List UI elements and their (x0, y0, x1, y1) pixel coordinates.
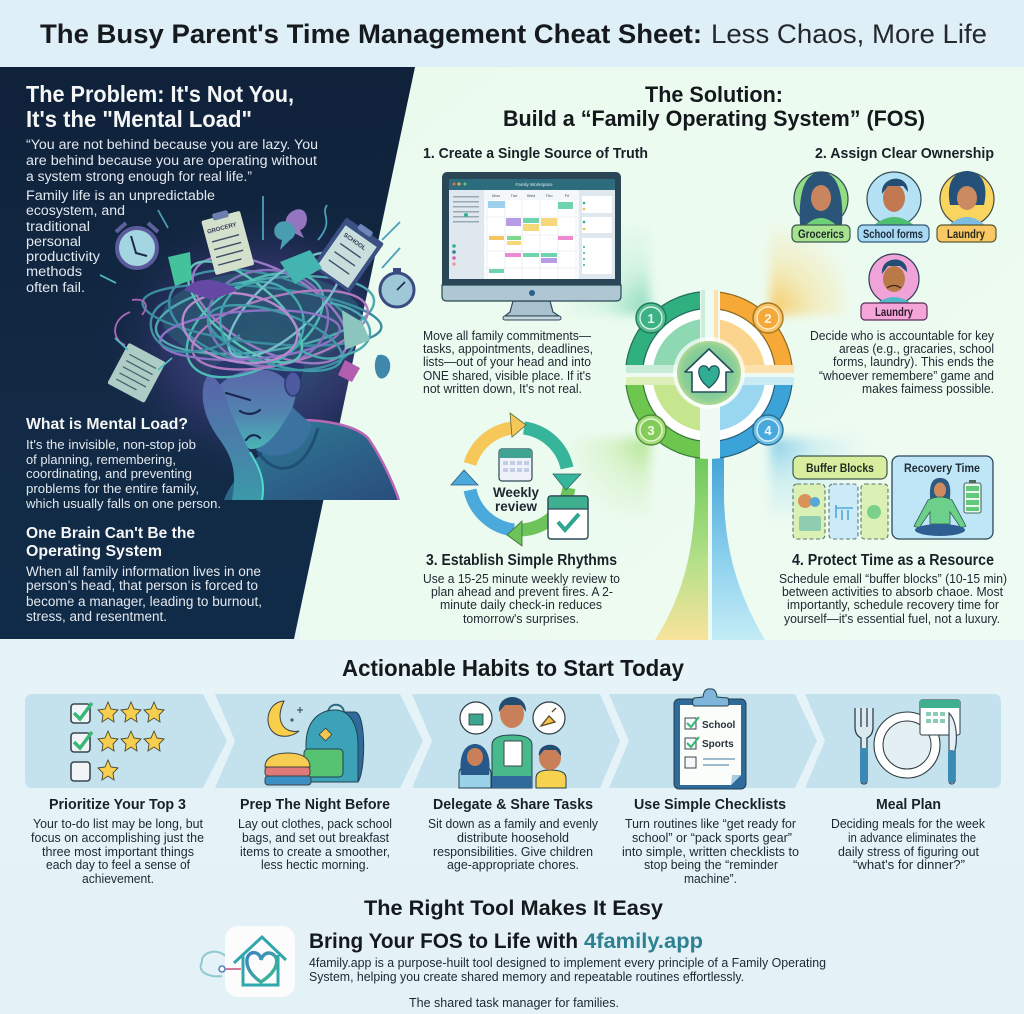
quote: a system strong enough for real life.” (26, 169, 252, 184)
body: what is mental load: which usually falls on one person. (25, 496, 221, 511)
head (220, 369, 296, 449)
avatar: school forms (858, 172, 929, 242)
icon: weekly review cycle (451, 413, 588, 546)
habit: meal plan: in advance eliminates the (848, 831, 976, 845)
brow, eye and mouth (226, 393, 260, 440)
badge 4 (753, 415, 783, 445)
title: Less Chaos, More Life (711, 19, 987, 49)
habit: prep the night before: Lay out clothes, pack school (238, 817, 392, 831)
heading: the problem (26, 81, 294, 132)
body 2: forms, laundry). This ends the (833, 355, 994, 369)
text: family life: ecosystem, and (26, 203, 125, 218)
body 3: Use a 15-25 minute weekly review to (423, 572, 620, 586)
body 2: Decide who is accountable for key (810, 329, 995, 343)
heading: the solution: The Solution: (645, 82, 783, 107)
quadrant 1 (626, 291, 700, 365)
icon: family delegating tasks (459, 697, 566, 788)
label: weekly review: Weekly (493, 484, 539, 500)
habit: delegate: Sit down as a family and evenly (428, 817, 599, 831)
heading 2: 2. Assign Clear Ownership (815, 145, 994, 162)
habit: meal plan: Meal Plan (876, 797, 941, 813)
habit: prioritize: focus on accomplishing just the (31, 831, 204, 845)
buffer icons (798, 494, 881, 531)
badge 2 (753, 303, 783, 333)
habit: delegate: responsibilities. Give children (433, 845, 593, 859)
body: one brain: stress, and resentment. (26, 609, 167, 624)
body 2: areas (e.g., gracaries, school (839, 342, 994, 356)
habit: checklists: machine”. (684, 872, 737, 886)
child right (536, 770, 566, 788)
illustration: overwhelmed parent with tangled thoughts (100, 196, 414, 500)
heading 1: 1. Create a Single Source of Truth (423, 145, 648, 162)
badge 3 (636, 415, 666, 445)
icon: floating notes and bubbles (168, 209, 390, 382)
icon: alarm clock (116, 223, 158, 268)
body 1: lists—out of your head and into (423, 355, 591, 369)
heading: what is mental load: What is Mental Load? (26, 416, 188, 433)
body 2: makes faimess possible. (862, 382, 994, 396)
habit: checklists: Turn routines like “get ready for (625, 817, 796, 831)
hair (210, 352, 304, 384)
cross bands (626, 365, 700, 373)
hand (203, 374, 263, 500)
habit: meal plan: daily stress of figuring out (838, 845, 980, 859)
heading: bring your FOS to life (309, 930, 703, 953)
icon: notepad (107, 343, 166, 403)
text: family life: productivity (26, 249, 100, 264)
text: family life: Family life is an unpredictable (26, 188, 215, 203)
body 4: yourself—it's essential fuel, not a luxury. (784, 612, 1000, 626)
title: The Busy Parent's Time Management Cheat Sheet: (40, 19, 702, 49)
body: what is mental load (25, 437, 221, 511)
heading: the right tool: The Right Tool Makes It Easy (364, 897, 663, 920)
habit: prioritize: three most important things (42, 845, 194, 859)
section 1: single source of truth (423, 145, 648, 396)
body 1: not written down, It's not real. (423, 382, 582, 396)
habit: checklists: into simple, written checklists to (622, 845, 799, 859)
panel text: what is mental load (25, 416, 221, 511)
habit: prioritize: achievement. (82, 872, 154, 886)
icon: monitor with calendar: Mon (492, 193, 500, 198)
diagram: family operating system wheel (625, 290, 794, 459)
connector fillets (565, 225, 863, 527)
badge 1 (636, 303, 666, 333)
habit: checklists: Use Simple Checklists (634, 797, 786, 813)
avatar: groceries: Grocerics (798, 227, 844, 241)
badge 3: 3 (647, 423, 655, 438)
body 3: tomorrow's surprises. (463, 612, 579, 626)
text: family life: personal (26, 234, 81, 249)
text: 4family description: System, helping you create shared memory and repeatable routines effortlessly. (309, 970, 744, 984)
body 4: importantly, schedule recovery time for (787, 598, 999, 612)
recovery time panel: Recovery Time (904, 461, 980, 475)
chevron banner (25, 694, 1001, 788)
icon: calendar (499, 449, 532, 481)
illustration glow (130, 229, 371, 458)
icon: 4family app logo (201, 926, 295, 997)
tagline: The shared task manager for families. (409, 996, 619, 1010)
neck (256, 405, 312, 456)
body 4: Schedule emall “buffer blocks” (10-15 min) (779, 572, 1007, 586)
icon: monitor with calendar: Fri (565, 193, 569, 198)
icon: check calendar (548, 496, 588, 539)
icon: checklist clipboard: Sports (702, 739, 734, 750)
habit: prep the night before (238, 797, 392, 872)
body 3 (423, 572, 620, 626)
quadrant 4 (720, 385, 792, 458)
habit: checklists: stop being the “reminder (644, 858, 778, 872)
label: weekly review (493, 484, 539, 514)
habit: delegate: Delegate & Share Tasks (433, 797, 593, 813)
body 1 (423, 329, 593, 396)
body: what is mental load: problems for the entire family, (26, 481, 199, 496)
icon: clipboard school (316, 218, 384, 292)
avatar: laundry pink (861, 254, 927, 320)
icon: prioritize checklist with stars (71, 702, 164, 781)
icon: clipboard grocery (200, 207, 254, 275)
body 1: ONE shared, visible place. If it's (423, 369, 591, 383)
child left (459, 765, 491, 788)
heading: actionable habits: Actionable Habits to Start Today (342, 655, 684, 681)
icon: monitor with calendar: Family Workspace (516, 182, 553, 187)
body: one brain: When all family information lives in one (26, 564, 261, 579)
habit: meal plan: “what's for dinner?” (853, 858, 965, 872)
habit: meal plan (831, 797, 986, 872)
icon: monitor with calendar: Thu (546, 193, 552, 198)
label: buffer blocks (793, 456, 887, 479)
text: family life: methods (26, 264, 82, 279)
icon: stopwatch (380, 268, 414, 307)
habit: prioritize: each day to feel a sense of (46, 858, 190, 872)
icon: monitor with calendar: Tue (511, 193, 518, 198)
stems below wheel (655, 445, 765, 640)
body 4 (779, 572, 1007, 626)
badge 1: 1 (647, 311, 655, 326)
header band (0, 0, 1024, 67)
heading 4: 4. Protect Time as a Resource (792, 552, 994, 569)
icon: house with heart (685, 349, 733, 392)
icon: checklist clipboard: School (702, 720, 736, 731)
icon: moon, backpack and clothes (265, 701, 364, 785)
body 2 (810, 329, 995, 396)
icon: checklist clipboard (674, 689, 746, 789)
text: 4family description: 4family.app is a purpose-huilt tool designed to implement every principle of a Family Operating (309, 956, 826, 970)
heading: one brain: Operating System (26, 543, 162, 560)
label: buffer blocks: Buffer Blocks (806, 461, 874, 475)
avatar: school forms: School forms (863, 227, 923, 241)
quote: are behind because you are operating without (26, 153, 317, 168)
body: one brain: become a manager, leading to burnout, (26, 594, 262, 609)
badge 4: 4 (764, 423, 772, 438)
recovery time panel (892, 456, 993, 539)
torso (224, 420, 399, 500)
text: 4family description (309, 956, 826, 984)
habit: prioritize: Your to-do list may be long, but (33, 817, 204, 831)
habit: delegate: age-appropriate chores. (447, 858, 579, 872)
avatar: laundry pink: Laundry (875, 305, 913, 319)
badge 2: 2 (764, 311, 772, 326)
section 3: simple rhythms (423, 413, 620, 626)
battery icon (964, 480, 981, 513)
body: what is mental load: It's the invisible, non-stop job (26, 437, 196, 452)
text: family life: traditional (26, 219, 90, 234)
habit: checklists: school” or “pack sports gear” (632, 831, 792, 845)
heading: the solution: Build a “Family Operating System” (FOS) (503, 106, 925, 131)
heading: bring your FOS to life: Bring Your FOS to Life with (309, 930, 578, 953)
heading: the problem: The Problem: It's Not You, (26, 81, 294, 107)
text: family life (26, 188, 215, 295)
habit: delegate: distribute hoosehold (457, 831, 569, 845)
parent (492, 735, 532, 788)
meditating person (914, 478, 966, 536)
avatar: laundry yellow: Laundry (947, 227, 985, 241)
tangled thoughts (141, 252, 383, 378)
habit: prioritize: Prioritize Your Top 3 (49, 797, 186, 813)
panel: solution background (300, 67, 1024, 640)
habit: delegate (428, 797, 599, 872)
section 4: protect time (779, 456, 1007, 626)
habit: prep the night before: less hectic morning. (261, 858, 369, 872)
text: family life: often fail. (26, 280, 85, 295)
heading 3: 3. Establish Simple Rhythms (426, 552, 617, 569)
habit: checklists (622, 797, 799, 886)
body: what is mental load: coordinating, and preventing (26, 466, 192, 481)
heading: the problem: It's the "Mental Load" (26, 106, 252, 132)
body: one brain (26, 564, 262, 624)
icon: meal plan plate and calendar (855, 700, 960, 784)
dashed buffer blocks (793, 484, 888, 539)
body: what is mental load: of planning, remembering, (26, 452, 176, 467)
scribbles (100, 196, 400, 370)
heading: one brain: One Brain Can't Be the (26, 525, 195, 542)
habit: prep the night before: items to create a smoother, (240, 845, 390, 859)
panel: the problem (0, 67, 415, 639)
body: one brain: person's head, that person is forced to (26, 578, 258, 593)
icon: monitor with calendar: Wed (527, 193, 535, 198)
quadrant 3 (626, 385, 700, 459)
avatar: laundry yellow (937, 171, 996, 242)
body 1: Move all family commitments— (423, 329, 591, 343)
ear (285, 372, 301, 396)
quote (26, 137, 318, 184)
body 2: “whoever remembere” game and (819, 369, 994, 383)
habit: prep the night before: bags, and set out breakfast (242, 831, 390, 845)
icon: clipboard school: SCHOOL (342, 232, 367, 252)
title (40, 19, 987, 49)
label: weekly review: review (495, 498, 537, 514)
heading: bring your FOS to life: 4family.app (584, 930, 703, 953)
icon: clipboard grocery: GROCERY (207, 222, 237, 236)
body 3: plan ahead and prevent fires. A 2- (431, 585, 613, 599)
icon: monitor with calendar (442, 172, 621, 320)
body 4: between activities to absorb chaoe. Most (782, 585, 1004, 599)
panel text: one brain (26, 525, 262, 624)
habit: meal plan: Deciding meals for the week (831, 817, 986, 831)
hub circle (673, 337, 745, 409)
heading: one brain (26, 525, 195, 560)
habit: prioritize (31, 797, 204, 886)
avatar: groceries (792, 172, 850, 242)
quote: “You are not behind because you are lazy. You (26, 137, 318, 152)
body 3: minute daily check-in reduces (440, 598, 602, 612)
body 1: tasks, appointments, deadlines, (423, 342, 593, 356)
quadrant 2 (720, 292, 792, 365)
heading: the solution (503, 82, 925, 131)
section 2: clear ownership (792, 145, 996, 396)
habit: prep the night before: Prep The Night Before (240, 797, 390, 813)
